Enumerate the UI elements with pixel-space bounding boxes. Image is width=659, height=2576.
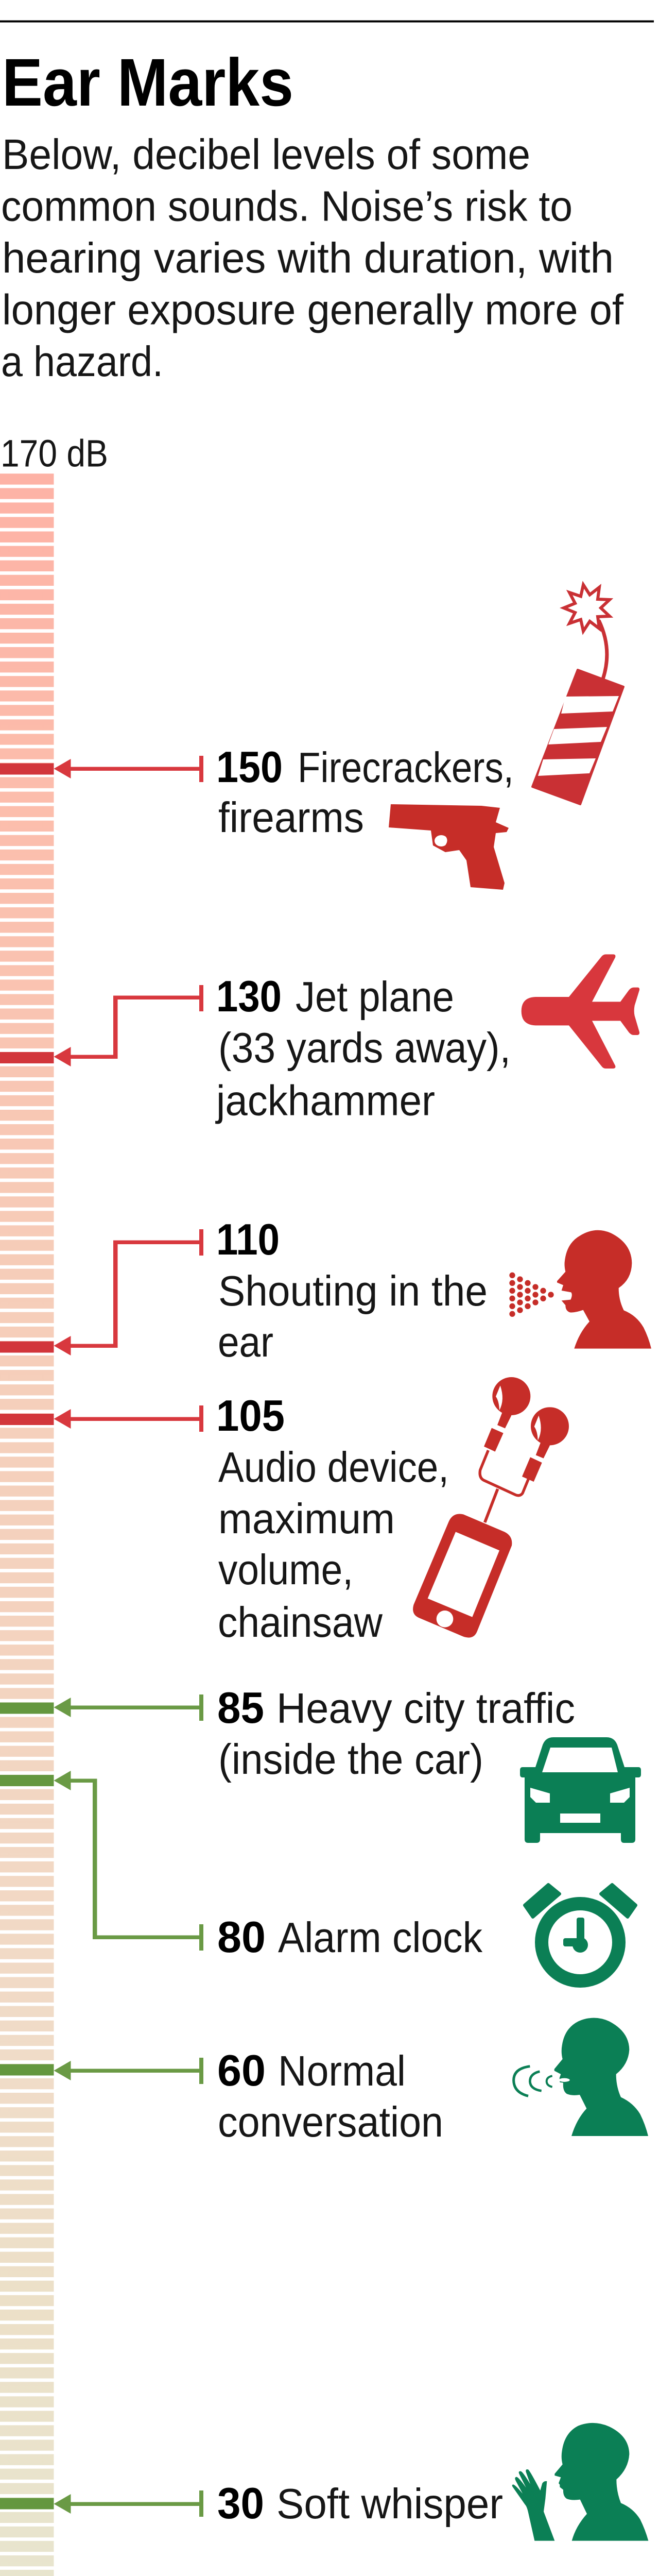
arrow: 80 — [54, 1771, 203, 1951]
decibel gauge — [0, 473, 54, 2576]
label: 130: Jet plane — [296, 973, 454, 1021]
scale top label: 170 dB — [1, 432, 108, 475]
label: 150 — [216, 743, 514, 841]
row: 105 audio device — [54, 1377, 569, 1646]
arrow: 105 — [54, 1405, 203, 1432]
icon: plane — [522, 954, 639, 1069]
label: 60: 60 — [217, 2046, 266, 2095]
label: 60: conversation — [218, 2098, 443, 2146]
row: 85 city traffic — [54, 1684, 641, 1843]
gauge highlighted levels — [0, 764, 54, 2509]
label: 105: volume, — [218, 1546, 353, 1594]
intro text: a hazard. — [1, 337, 163, 385]
icon: whispering person — [512, 2423, 648, 2541]
row: 80 alarm clock — [54, 1771, 636, 1981]
icon: talking person — [514, 2018, 648, 2136]
label: 85 — [217, 1684, 575, 1783]
icon: car — [520, 1737, 641, 1843]
arrow: 60 — [54, 2058, 203, 2084]
label: 80: Alarm clock — [278, 1913, 482, 1961]
label: 105: 105 — [216, 1392, 285, 1440]
icon: firecracker — [532, 585, 623, 804]
intro text — [1, 130, 624, 385]
icon: handgun — [389, 804, 509, 890]
label: 150: firearms — [218, 793, 364, 841]
label: 110 — [216, 1215, 488, 1366]
label: 60: Normal — [278, 2047, 406, 2095]
arrow: 30 — [54, 2490, 203, 2517]
label: 110: ear — [218, 1318, 273, 1366]
label: 150: Firecrackers, — [298, 743, 514, 791]
label: 105: Audio device, — [218, 1443, 449, 1491]
label: 130 — [215, 972, 511, 1124]
label: 110: 110 — [216, 1215, 280, 1264]
label: 85: 85 — [217, 1684, 264, 1733]
label: 130: jackhammer — [215, 1077, 435, 1124]
arrow: 110 — [54, 1229, 203, 1355]
label: 130: (33 yards away), — [218, 1024, 511, 1072]
label: 105 — [216, 1392, 449, 1646]
row: 150 firecrackers — [54, 585, 623, 890]
arrow: 150 — [54, 756, 203, 782]
label: 60 — [217, 2046, 443, 2146]
label: 130: 130 — [216, 972, 282, 1021]
label: 85: Heavy city traffic — [276, 1684, 575, 1732]
intro text: Below, decibel levels of some — [2, 130, 530, 178]
row: 60 conversation — [54, 2018, 648, 2146]
label: 150: 150 — [216, 743, 283, 792]
arrow: 85 — [54, 1694, 203, 1721]
label: 85: (inside the car) — [218, 1735, 483, 1783]
row: 130 jet plane — [54, 954, 639, 1124]
title: Ear Marks — [2, 44, 293, 120]
icon: earbuds and phone — [413, 1377, 569, 1638]
icon: alarm clock — [525, 1885, 636, 1981]
label: 105: chainsaw — [218, 1598, 383, 1646]
label: 30: 30 — [217, 2479, 264, 2528]
label: 80: 80 — [217, 1913, 266, 1962]
row: 110 shouting — [54, 1215, 651, 1366]
arrow: 130 — [54, 985, 203, 1066]
intro text: longer exposure generally more of — [2, 285, 624, 334]
label: 110: Shouting in the — [218, 1267, 488, 1315]
row: 30 whisper — [54, 2423, 648, 2541]
label: 30: Soft whisper — [276, 2480, 503, 2528]
icon: shouting person — [509, 1230, 651, 1349]
top rule — [0, 21, 654, 23]
intro text: hearing varies with duration, with — [2, 234, 614, 282]
label: 105: maximum — [218, 1495, 395, 1543]
intro text: common sounds. Noise’s risk to — [1, 182, 573, 230]
